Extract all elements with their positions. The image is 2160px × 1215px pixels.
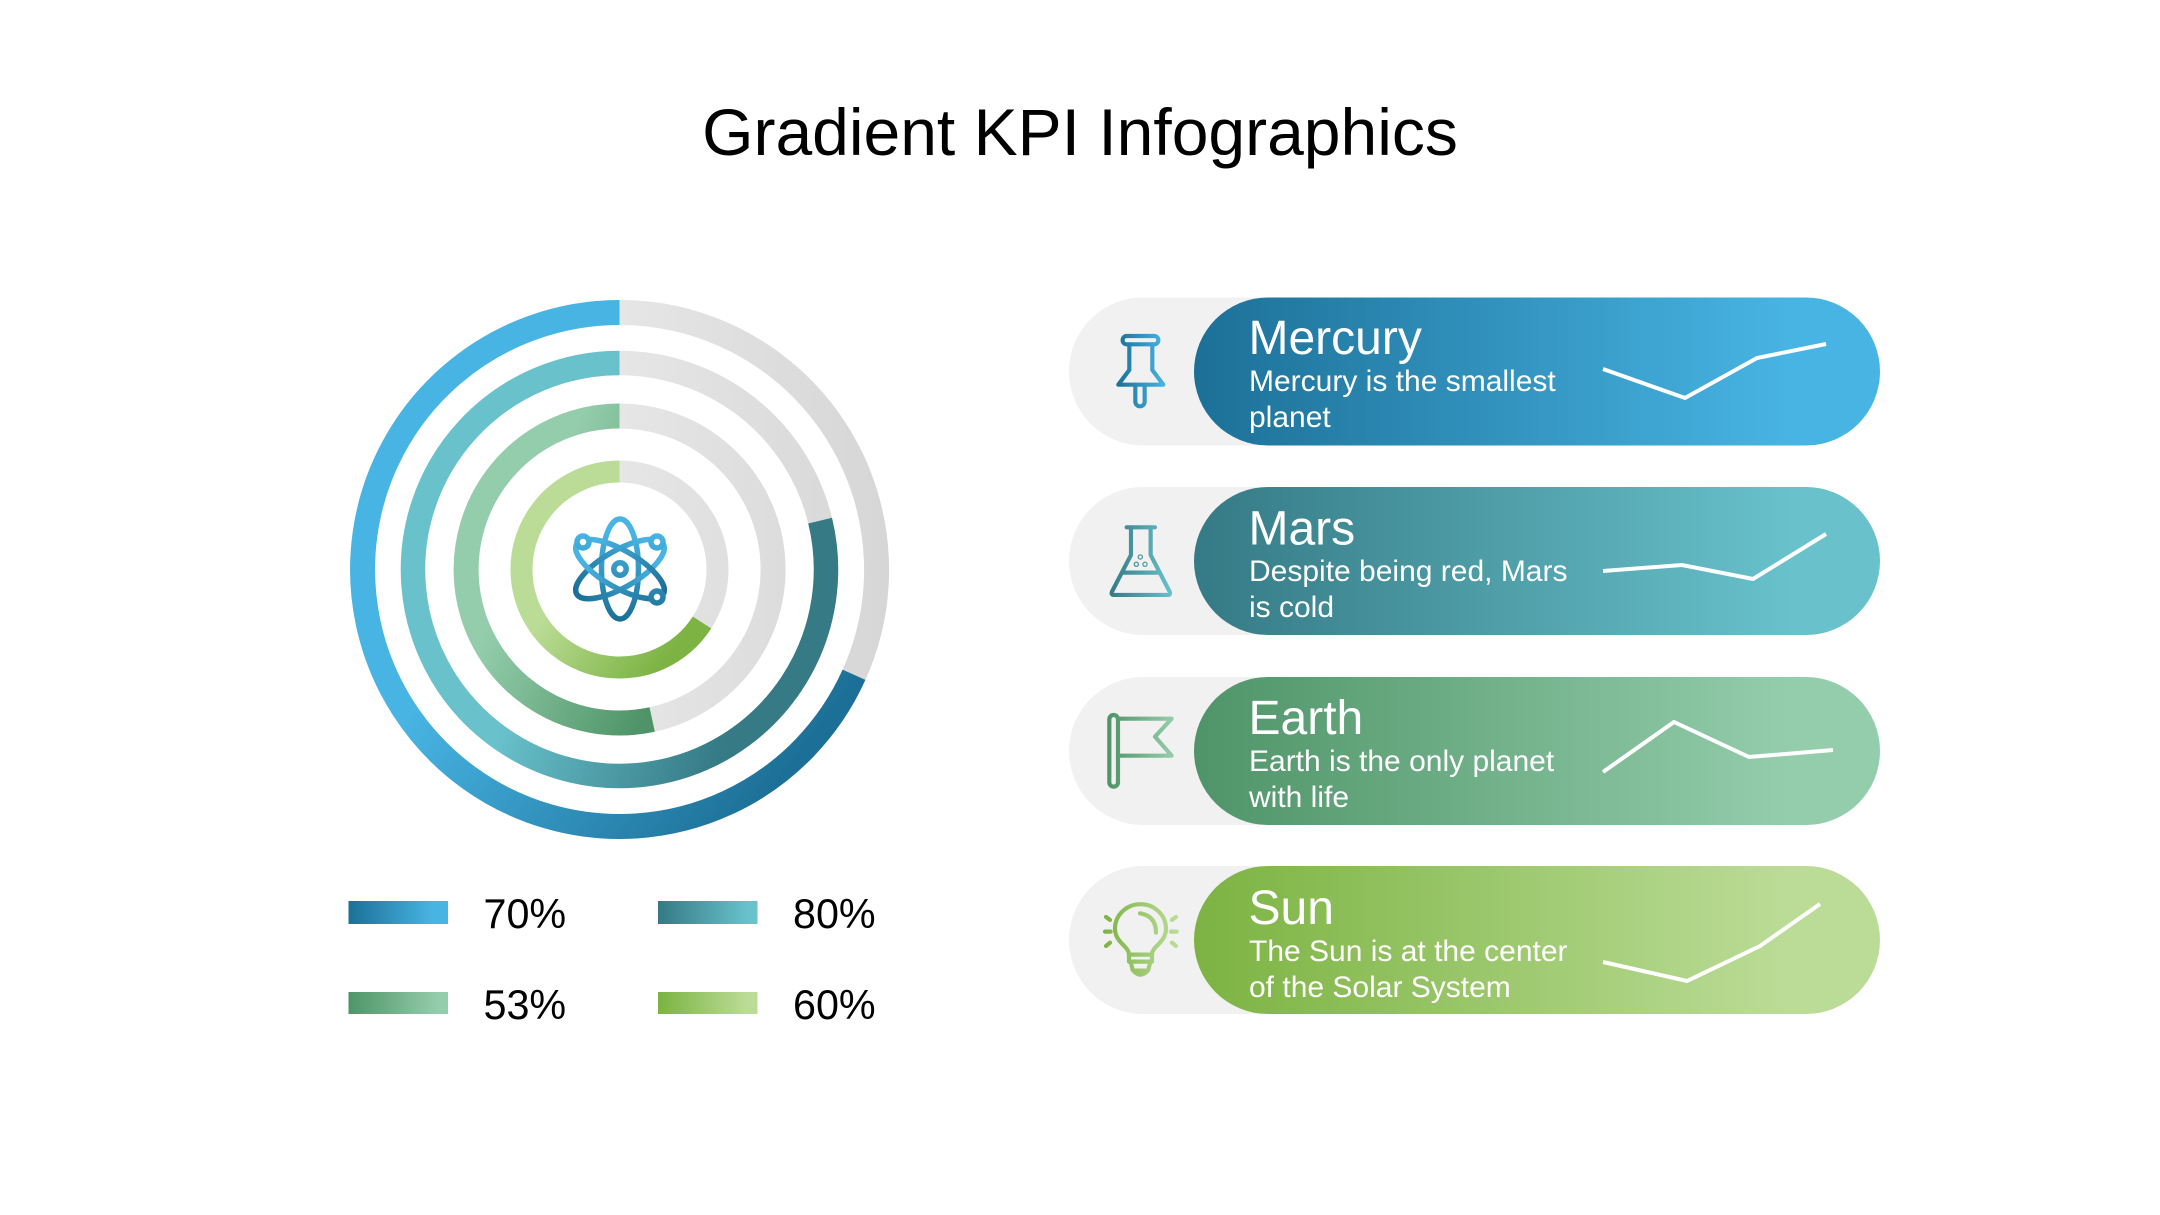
pill background xyxy=(1069,298,1329,446)
heading: Mercury xyxy=(1248,312,1422,365)
gradient pill xyxy=(1194,866,1880,1014)
pill background xyxy=(1069,487,1329,635)
legend item: 80% xyxy=(658,891,876,937)
legend item: 53%: 53% xyxy=(484,982,566,1028)
legend item: 70% xyxy=(348,891,566,937)
description: The Sun is at the center xyxy=(1249,935,1568,968)
icon: atom xyxy=(567,519,673,619)
panel: Mars xyxy=(1069,487,1880,635)
legend item: 60% xyxy=(658,982,876,1028)
description: is cold xyxy=(1249,591,1334,624)
ring: 60% xyxy=(522,471,718,668)
radial progress chart xyxy=(363,312,877,826)
description: of the Solar System xyxy=(1249,971,1511,1004)
panel: Mercury xyxy=(1069,298,1880,446)
legend item: 53% xyxy=(348,982,566,1028)
heading: Sun xyxy=(1248,882,1334,935)
title: Gradient KPI Infographics xyxy=(702,95,1458,169)
panel: Sun xyxy=(1069,866,1880,1014)
pill background xyxy=(1069,866,1329,1014)
legend item: 80%: 80% xyxy=(793,891,876,937)
sparkline xyxy=(1603,534,1826,579)
ring: 70% xyxy=(363,312,877,826)
sparkline xyxy=(1603,722,1833,772)
description: planet xyxy=(1249,401,1331,434)
icon: flag xyxy=(1109,715,1172,787)
legend item: 60%: 60% xyxy=(793,982,876,1028)
sparkline xyxy=(1603,344,1826,398)
icon: light bulb xyxy=(1105,904,1177,975)
gradient pill xyxy=(1194,677,1880,825)
heading: Mars xyxy=(1248,502,1355,556)
description: with life xyxy=(1248,781,1349,814)
ring: 80% xyxy=(413,363,826,776)
gradient pill xyxy=(1194,298,1880,446)
heading: Earth xyxy=(1248,692,1363,745)
description: Earth is the only planet xyxy=(1249,745,1555,778)
description: Mercury is the smallest xyxy=(1249,365,1556,398)
gradient pill xyxy=(1194,487,1880,635)
icon: pushpin xyxy=(1118,336,1163,406)
legend item: 70%: 70% xyxy=(484,891,566,937)
panel: Earth xyxy=(1069,677,1880,825)
sparkline xyxy=(1603,904,1820,981)
legend xyxy=(348,891,876,1028)
description: Despite being red, Mars xyxy=(1249,555,1568,588)
icon: flask xyxy=(1112,527,1170,595)
pill background xyxy=(1069,677,1329,825)
ring: 53% xyxy=(466,416,773,723)
